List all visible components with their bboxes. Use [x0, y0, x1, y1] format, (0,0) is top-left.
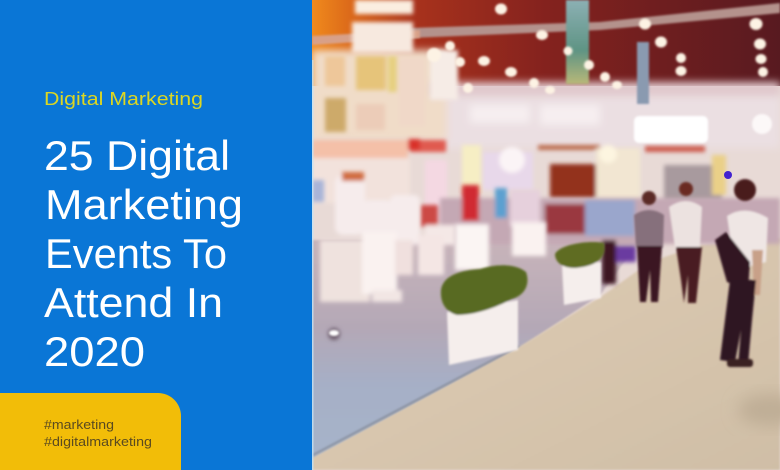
person: grey shirt — [634, 191, 664, 302]
floor patch — [738, 394, 780, 426]
planter: small — [555, 242, 605, 305]
category label: Digital Marketing — [44, 88, 203, 109]
lit sign — [634, 114, 772, 143]
panel: blue title panel — [0, 0, 312, 470]
title: 25 Digital — [44, 132, 230, 179]
wall — [312, 50, 780, 148]
planter: large — [441, 265, 527, 365]
hashtags: #digitalmarketing — [44, 434, 152, 449]
title — [44, 132, 243, 375]
hashtags — [44, 417, 152, 449]
title: Attend In — [44, 279, 223, 326]
ceiling lights — [427, 4, 768, 94]
photo: blurred exhibition hall — [312, 0, 780, 470]
ceiling — [312, 0, 780, 86]
white furniture — [320, 172, 546, 340]
person: foreground — [715, 179, 768, 367]
blue dot — [724, 171, 732, 179]
left booth — [312, 0, 533, 222]
banners — [566, 0, 649, 104]
carpet — [312, 240, 640, 460]
crowd — [312, 180, 780, 284]
person: white shirt — [669, 182, 702, 303]
people — [634, 179, 768, 367]
spot on carpet — [329, 330, 339, 336]
title: 2020 — [44, 328, 145, 375]
floor — [312, 238, 780, 470]
tag panel: yellow hashtag box — [0, 393, 181, 470]
title: Events To — [45, 230, 227, 277]
left edge highlight — [312, 60, 314, 470]
carpet edge — [313, 346, 519, 455]
mid booths — [499, 145, 726, 201]
hashtags: #marketing — [44, 417, 114, 432]
title: Marketing — [45, 181, 243, 228]
